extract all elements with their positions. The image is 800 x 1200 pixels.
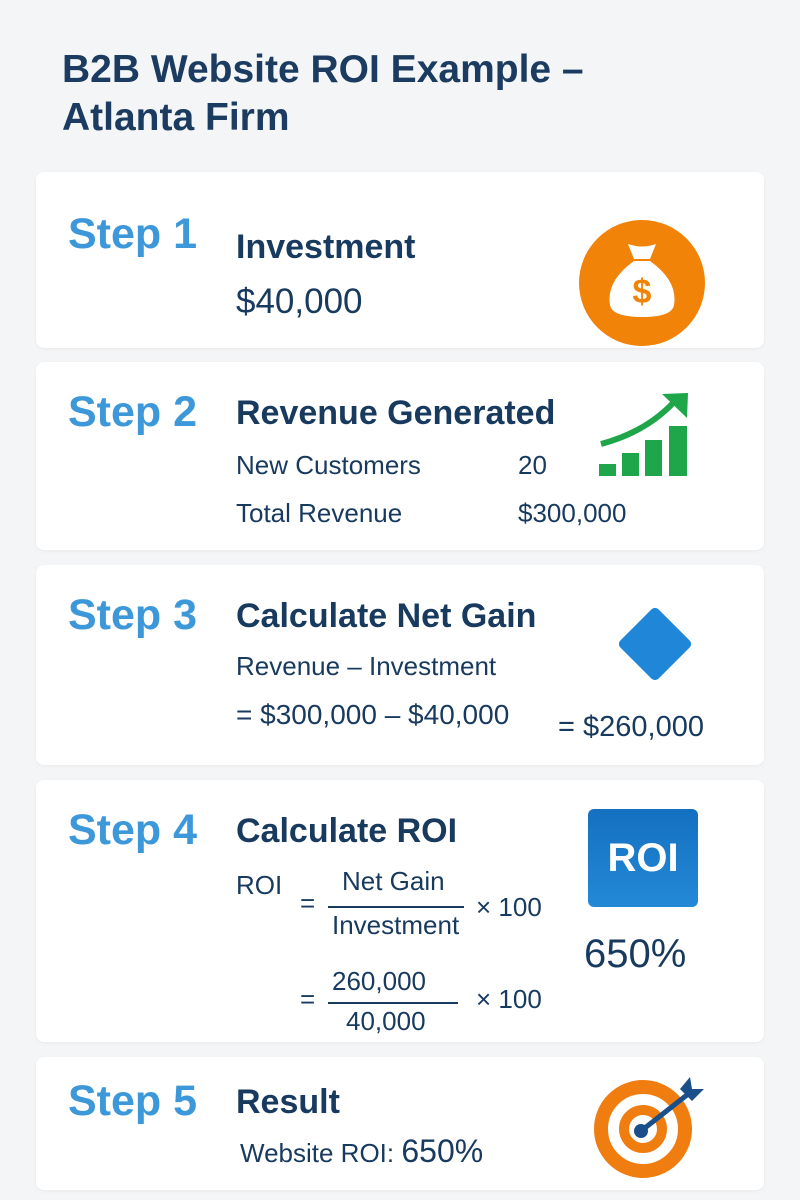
icon: target bbox=[594, 1077, 704, 1178]
heading investment: Investment bbox=[236, 228, 416, 266]
roi formula: Net Gain bbox=[342, 866, 445, 896]
icon: growth chart bbox=[599, 393, 688, 476]
roi formula: = bbox=[300, 888, 315, 918]
icon: roi badge: ROI bbox=[607, 836, 679, 880]
heading calculate roi: Calculate ROI bbox=[236, 812, 457, 850]
icon: money bag: $ bbox=[633, 273, 652, 311]
result net gain: = $260,000 bbox=[558, 711, 704, 743]
step 2 label: Step 2 bbox=[68, 388, 197, 436]
formula text: Revenue – Investment bbox=[236, 651, 496, 681]
roi calculation: = bbox=[300, 984, 315, 1014]
panel: step 2 bbox=[36, 362, 764, 550]
roi formula: ROI bbox=[236, 870, 282, 900]
website roi result: Website ROI: 650% bbox=[240, 1133, 483, 1169]
roi formula: Investment bbox=[332, 910, 459, 940]
roi value: 650% bbox=[584, 932, 686, 976]
heading result: Result bbox=[236, 1083, 340, 1121]
step 1 label: Step 1 bbox=[68, 210, 197, 258]
icon: roi badge bbox=[588, 809, 698, 907]
roi formula bbox=[236, 866, 542, 940]
icon: money bag bbox=[579, 220, 705, 346]
roi calculation: 40,000 bbox=[346, 1006, 426, 1036]
title bbox=[62, 48, 584, 139]
calculation: = $300,000 – $40,000 bbox=[236, 699, 509, 730]
panel: step 5 bbox=[36, 1057, 764, 1190]
row total revenue: $300,000 bbox=[518, 498, 626, 528]
title: B2B Website ROI Example – bbox=[62, 48, 584, 91]
icon: diamond bbox=[618, 608, 692, 680]
roi calculation: × 100 bbox=[476, 984, 542, 1014]
row total revenue: Total Revenue bbox=[236, 498, 402, 528]
heading revenue generated: Revenue Generated bbox=[236, 394, 555, 432]
row new customers: New Customers bbox=[236, 450, 421, 480]
step 4 label: Step 4 bbox=[68, 806, 197, 854]
roi calculation bbox=[300, 966, 542, 1036]
step 5 label: Step 5 bbox=[68, 1077, 197, 1125]
row new customers bbox=[236, 450, 547, 480]
step 3 label: Step 3 bbox=[68, 591, 197, 639]
panel: step 3 bbox=[36, 565, 764, 765]
title: Atlanta Firm bbox=[62, 96, 290, 139]
value investment: $40,000 bbox=[236, 282, 363, 321]
roi formula: × 100 bbox=[476, 892, 542, 922]
panel: step 4 bbox=[36, 780, 764, 1042]
panel: step 1 bbox=[36, 172, 764, 348]
roi calculation: 260,000 bbox=[332, 966, 426, 996]
row total revenue bbox=[236, 498, 626, 528]
heading net gain: Calculate Net Gain bbox=[236, 597, 536, 635]
row new customers: 20 bbox=[518, 450, 547, 480]
